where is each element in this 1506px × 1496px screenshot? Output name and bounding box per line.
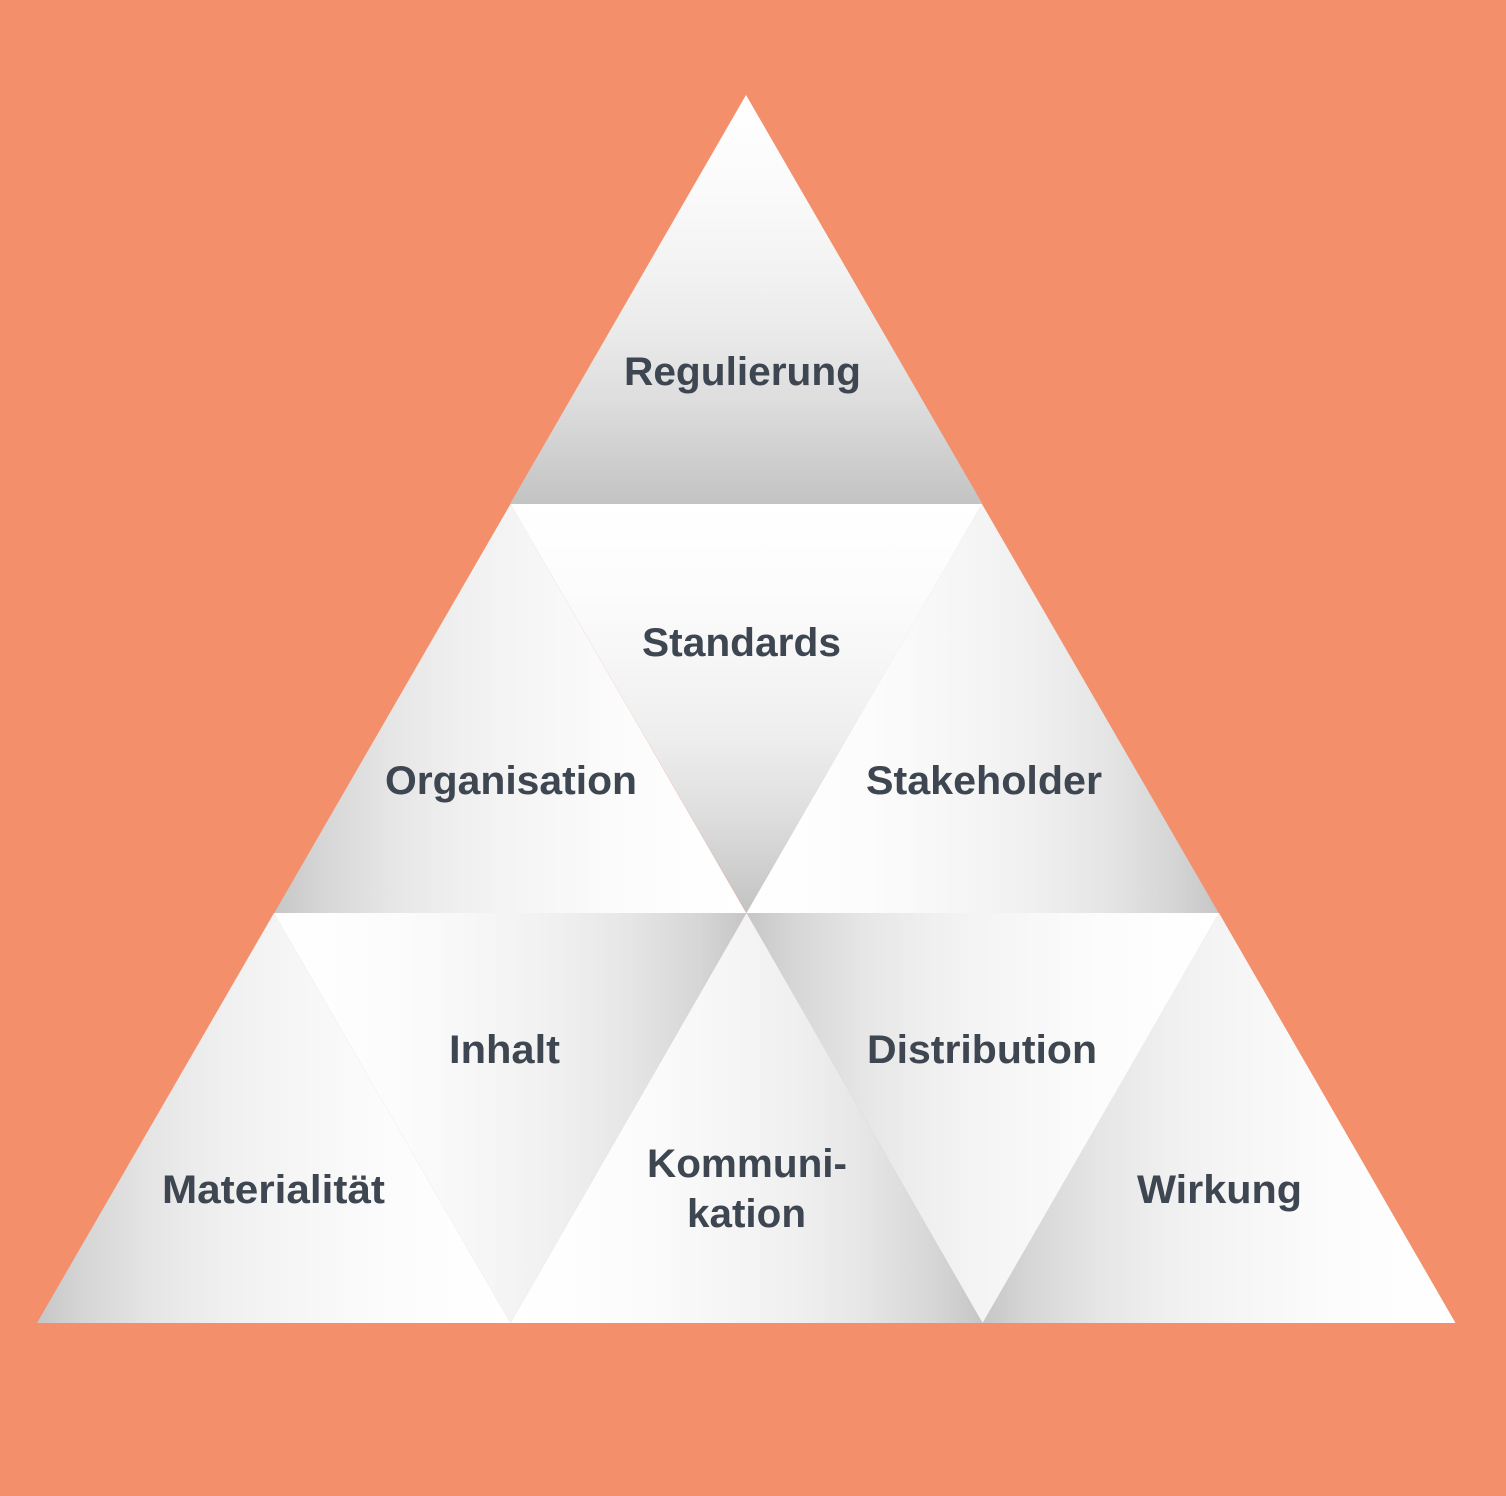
panel: Regulierung: Regulierung: [624, 350, 861, 394]
panel: Distribution: Distribution: [867, 1028, 1097, 1072]
panel: Organisation: Organisation: [385, 759, 637, 803]
panel: Wirkung: [982, 913, 1456, 1323]
panel: Organisation: [274, 504, 746, 914]
panel: Inhalt: [274, 913, 746, 1323]
panel: Distribution: [746, 913, 1219, 1323]
panel: Standards: [510, 504, 982, 913]
panel: Kommunikation: kation: [687, 1192, 806, 1236]
panel: Materialität: Materialität: [162, 1168, 385, 1212]
panel: Inhalt: Inhalt: [449, 1028, 560, 1072]
panel: Kommunikation: Kommuni-: [647, 1142, 847, 1186]
panel: Kommunikation: [510, 913, 982, 1323]
panel: Materialität: [37, 913, 510, 1323]
panel: Stakeholder: Stakeholder: [866, 759, 1102, 803]
panel: Wirkung: Wirkung: [1137, 1168, 1302, 1212]
panel: Standards: Standards: [642, 621, 841, 665]
panel: Regulierung: [510, 95, 982, 504]
panel: Stakeholder: [746, 504, 1219, 914]
